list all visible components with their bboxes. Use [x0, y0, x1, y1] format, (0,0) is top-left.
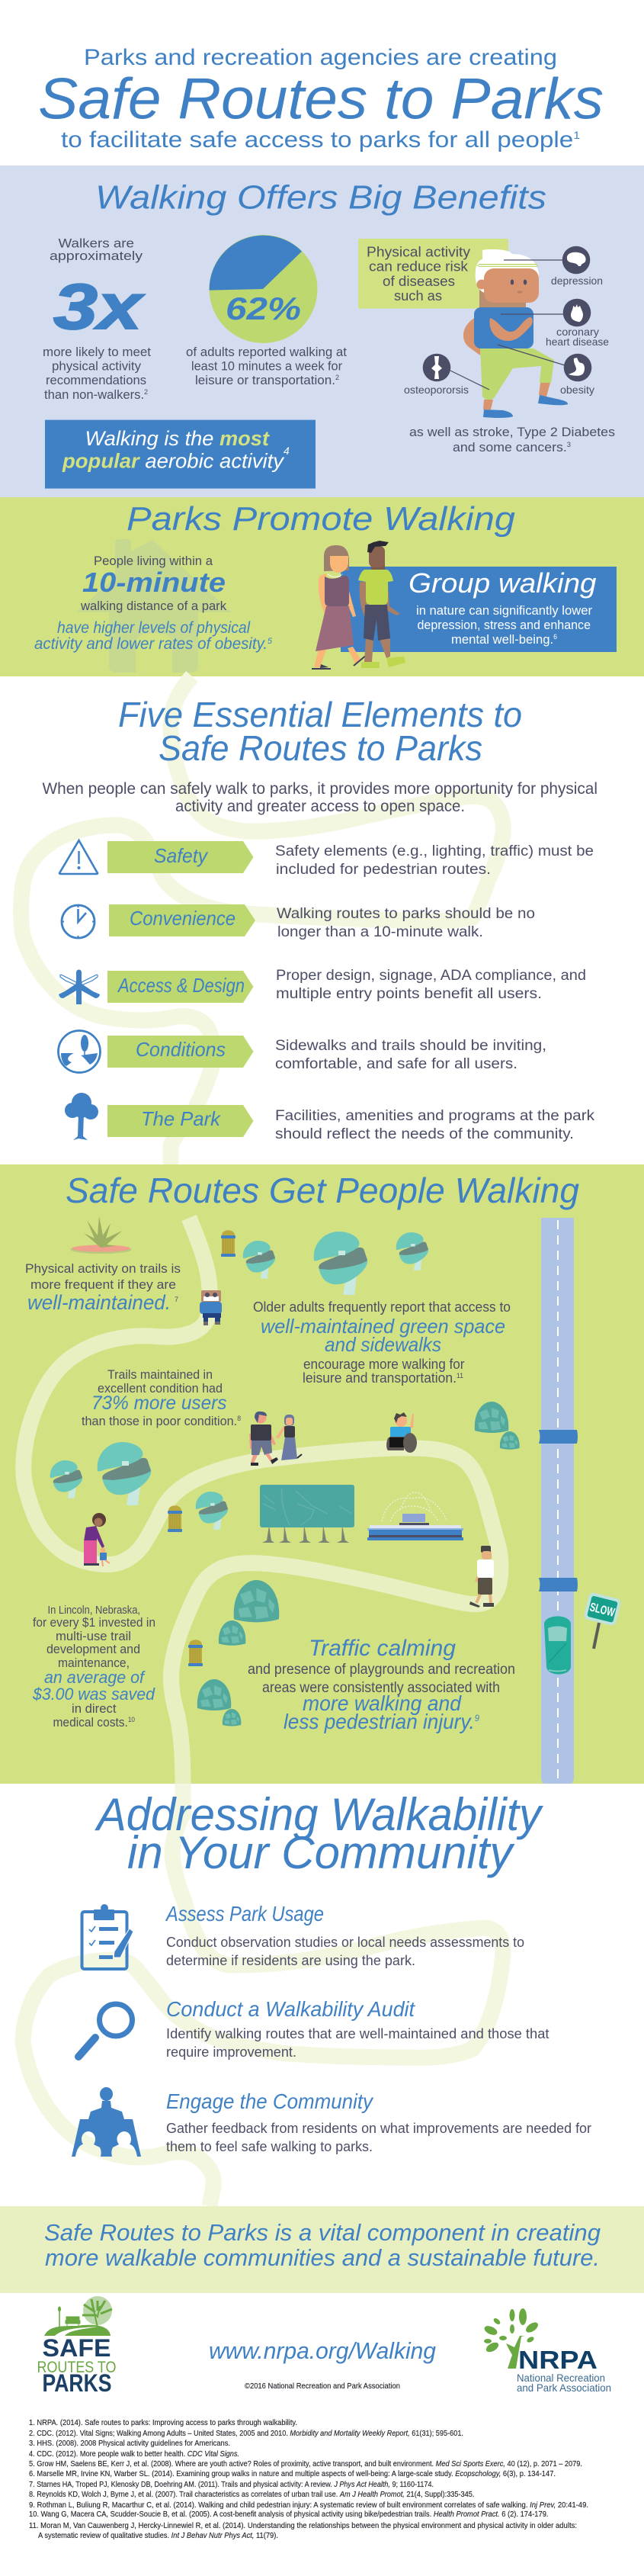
text: conduct a walkability audit: require improvement. — [166, 2044, 296, 2060]
text: traffic calming: Traffic calming — [309, 1636, 456, 1661]
callout: group walking: mental well-being. — [451, 632, 556, 647]
label: access and design — [107, 971, 253, 1003]
label: safety — [107, 841, 253, 873]
icon: bush — [197, 1679, 231, 1710]
text: older adults: and sidewalks — [325, 1333, 441, 1356]
illustration: fountain — [367, 1492, 463, 1540]
references: 7. Starnes HA, Troped PJ, Klenosky DB, Doehring AM. (2011). Trails and physical activity: A review. J Phys Act Health, 9; 1160-1174. — [29, 2480, 434, 2489]
logo: nrpa — [483, 2308, 611, 2394]
label: convenience: Convenience — [130, 907, 235, 930]
stat: 3x more likely — [43, 236, 151, 402]
line: osteoporosis — [450, 371, 489, 390]
callout: physical activity can reduce risk: can reduce risk — [369, 259, 469, 275]
text: older adults: Older adults frequently report that access to — [253, 1299, 511, 1315]
text: convenience — [277, 906, 535, 940]
text: lincoln nebraska: in direct — [72, 1701, 117, 1716]
icon: clipboard — [82, 1904, 133, 1969]
text: 10-minute walking distance: 10-minute — [82, 567, 226, 598]
icon: stomach — [564, 354, 591, 381]
references: 9. Rothman L, Buliung R, Macarthur C, et al. (2014). Walking and child pedestrian injury: A systematic review of built environment correlates of safe walking. Inj Prev, 20:41-49. — [29, 2501, 588, 2510]
heading: walking offers big benefits: Walking Offers Big Benefits — [95, 178, 546, 217]
text: traffic calming — [248, 1636, 515, 1733]
text: traffic calming: and presence of playgrounds and recreation — [248, 1662, 515, 1678]
icon: slow sign — [583, 1592, 622, 1649]
heading: safe routes get people walking: Safe Routes Get People Walking — [66, 1171, 579, 1210]
crosswalk band — [539, 1578, 578, 1592]
icon: trash can — [221, 1230, 235, 1257]
text: trails maintained — [82, 1367, 241, 1428]
icon: tree — [396, 1232, 428, 1270]
text: engage the community: Gather feedback from residents on what improvements are needed for — [166, 2121, 591, 2136]
panel: five essential elements — [43, 695, 598, 1142]
text: trails maintained: Trails maintained in — [107, 1367, 213, 1382]
pie chart: 62 percent — [209, 235, 317, 343]
icon: trash can — [188, 1640, 203, 1666]
icon: signpost — [59, 970, 100, 1004]
icon: tree — [50, 1460, 82, 1498]
panel: closing statement — [0, 2206, 644, 2293]
text: as well as stroke: 3 — [567, 441, 571, 448]
text: traffic calming: 9 — [475, 1713, 479, 1723]
label: the park: The Park — [141, 1107, 222, 1130]
illustration: older man on trail — [200, 1290, 222, 1325]
main title: Safe Routes to Parks — [38, 67, 604, 131]
text: lincoln nebraska: an average of — [44, 1668, 146, 1687]
illustration: plant — [70, 1216, 131, 1254]
text: access and design: multiple entry points benefit all users. — [276, 986, 542, 1002]
text: traffic calming: more walking and — [303, 1691, 462, 1715]
heading: five essential elements — [118, 695, 522, 768]
stat: 3x more likely: physical activity — [52, 358, 141, 374]
references: A systematic review of qualitative studies. Int J Behav Nutr Phys Act, 11(79). — [38, 2531, 278, 2540]
text: conduct a walkability audit — [166, 1997, 549, 2060]
text: lincoln nebraska: multi-use trail — [56, 1629, 131, 1643]
text: older adults: encourage more walking for — [303, 1357, 465, 1372]
callout: group walking: depression, stress and enhance — [418, 618, 591, 632]
text: trails maintained: 73% more users — [91, 1392, 227, 1414]
icon: brain — [562, 246, 590, 274]
link: nrpa walking: www.nrpa.org/Walking — [209, 2337, 436, 2364]
text: of adults reported walking: 2 — [335, 374, 339, 381]
text: of adults reported walking: of adults reported walking at — [186, 345, 347, 359]
references: 1. NRPA. (2014). Safe routes to parks: Improving access to parks through walkability. — [29, 2418, 297, 2427]
icon: ghost house — [76, 539, 232, 673]
line: coronary — [501, 313, 564, 315]
text: of adults reported walking: leisure or transportation. — [195, 373, 335, 387]
icon: bush — [219, 1620, 245, 1646]
references: 11. Moran M, Van Cauwenberg J, Hercky-Linnewiel R, et al. (2014). Understanding the relationships between the physical environment and physical activity in older adults: — [29, 2521, 577, 2530]
text: engage the community: Engage the Community — [166, 2089, 374, 2113]
text: trails maintained: excellent condition had — [98, 1381, 223, 1396]
text: safety: included for pedestrian routes. — [276, 862, 491, 878]
text: trails maintained: 8 — [237, 1415, 241, 1422]
callout: most popular aerobic activity — [45, 420, 316, 489]
stat: 3x more likely: more likely to meet — [43, 345, 151, 359]
callout: most popular aerobic activity: Walking is the most — [85, 427, 270, 450]
stat: 3x more likely: than non-walkers. — [44, 387, 146, 402]
text: older adults: well-maintained green space — [261, 1315, 505, 1338]
copyright: ©2016 National Recreation and Park Association — [245, 2382, 400, 2391]
text: physical activity on trails: more frequent if they are — [30, 1277, 176, 1292]
text: conduct a walkability audit: Conduct a Walkability Audit — [166, 1997, 415, 2021]
text: 10-minute walking distance — [34, 554, 273, 653]
text: older adults: leisure and transportation. — [303, 1370, 461, 1386]
text: lincoln nebraska: 10 — [128, 1716, 135, 1723]
text: lincoln nebraska: maintenance, — [58, 1656, 130, 1670]
label: coronary heart disease: coronary — [556, 326, 599, 338]
references — [29, 2418, 588, 2540]
label: access and design: Access & Design — [117, 974, 245, 997]
text: lincoln nebraska: for every $1 invested in — [33, 1615, 155, 1630]
stat: 3x more likely: Walkers are — [58, 236, 134, 251]
panel: addressing walkability — [72, 1789, 591, 2157]
text: older adults — [253, 1299, 511, 1386]
text: assess park usage: Conduct observation studies or local needs assessments to — [166, 1935, 524, 1950]
label: the park — [107, 1105, 253, 1137]
trail: pale route behind addressing walkability — [23, 1784, 503, 2206]
panel: parks promote walking — [0, 497, 644, 676]
text: the park — [275, 1108, 595, 1142]
text: conditions — [275, 1038, 546, 1072]
icon: bush — [475, 1402, 508, 1433]
text: the park: should reflect the needs of the community. — [275, 1126, 574, 1142]
label: conditions: Conditions — [136, 1038, 226, 1061]
trail — [24, 1218, 501, 1784]
text: physical activity on trails: 7 — [175, 1296, 178, 1303]
stat: 3x more likely: 3x — [53, 271, 145, 342]
text: traffic calming: areas were consistently associated with — [262, 1680, 500, 1696]
illustration: woman walking — [312, 545, 367, 670]
text: access and design — [276, 968, 586, 1002]
text: older adults: 11 — [457, 1372, 463, 1380]
crosswalk band — [539, 1430, 578, 1444]
line: depression — [504, 259, 562, 261]
pie chart: 62 percent: 62% — [226, 291, 301, 326]
text: as well as stroke: as well as stroke, Type 2 Diabetes — [409, 425, 615, 439]
text: safety: Safety elements (e.g., lighting, traffic) must be — [275, 843, 594, 859]
callout: group walking: 6 — [553, 633, 557, 641]
panel: walking offers big benefits — [0, 165, 644, 497]
text: 10-minute walking distance: walking distance of a park — [80, 599, 226, 613]
text: lincoln nebraska: In Lincoln, Nebraska, — [47, 1604, 140, 1617]
text: assess park usage: determine if residents are using the park. — [166, 1953, 415, 1968]
references: 10. Wang G, Macera CA, Scudder-Soucie B, et al. (2005). A cost-benefit analysis of physical activity using bike/pedestrian trails. Health Promot Pract. 6 (2). 174-179. — [29, 2510, 549, 2519]
references: 8. Reynolds KD, Wolch J, Byrne J, et al. (2007). Trail characteristics as correlates of urban trail use. Am J Health Promot, 21(4, Suppl):335-345. — [29, 2490, 474, 2499]
logo: safe routes to parks: ROUTES TO — [37, 2359, 116, 2376]
text: lincoln nebraska: $3.00 was saved — [32, 1685, 155, 1704]
trail: pale route behind five essential elements — [21, 676, 503, 1164]
logo: safe routes to parks: PARKS — [43, 2369, 111, 2397]
intro text: When people can safely walk to parks, it provides more opportunity for physical — [43, 780, 598, 798]
icon: magnifier — [78, 2004, 133, 2057]
text: 10-minute walking distance: have higher levels of physical — [57, 619, 251, 637]
icon: clock — [61, 904, 95, 939]
text: conditions: comfortable, and safe for all users. — [275, 1056, 517, 1072]
intro text — [43, 780, 598, 815]
callout: most popular aerobic activity: 4 — [284, 445, 290, 457]
references: 3. HHS. (2008). 2008 Physical activity guidelines for Americans. — [29, 2439, 230, 2448]
heading: five essential elements: Five Essential Elements to — [118, 695, 522, 734]
text: conduct a walkability audit: Identify walking routes that are well-maintained and those that — [166, 2026, 549, 2041]
line: obesity — [498, 345, 565, 365]
icon: bush — [223, 1709, 241, 1726]
icon: bush — [234, 1580, 279, 1622]
header subtitle: to facilitate safe access to parks for all people — [61, 127, 522, 153]
illustration: couple walking — [249, 1412, 302, 1466]
text: of adults reported walking — [186, 345, 347, 387]
text: conditions: Sidewalks and trails should be inviting, — [275, 1038, 546, 1054]
callout: physical activity can reduce risk — [358, 239, 508, 309]
text: physical activity on trails: well-maintained. — [27, 1291, 171, 1314]
text: assess park usage: Assess Park Usage — [165, 1902, 324, 1926]
icon: warning triangle — [59, 840, 98, 874]
illustration: hedge — [260, 1485, 354, 1543]
icon: tree — [65, 1093, 98, 1140]
text: assess park usage — [165, 1902, 524, 1968]
text: trails maintained: than those in poor condition. — [82, 1414, 245, 1428]
icon: conditions — [58, 1031, 101, 1072]
label: obesity: obesity — [560, 384, 594, 396]
icon: bones — [423, 354, 450, 381]
text: access and design: Proper design, signage, ADA compliance, and — [276, 968, 586, 984]
text: as well as stroke — [409, 425, 615, 454]
text: 10-minute walking distance: People living within a — [94, 554, 213, 568]
icon: tree — [98, 1442, 151, 1505]
logo: safe routes to parks — [37, 2296, 116, 2397]
callout: group walking: in nature can significantly lower — [416, 603, 592, 618]
logo: safe routes to parks: SAFE — [43, 2334, 111, 2362]
label: osteoporosis: osteopororsis — [404, 384, 469, 396]
stat: 3x more likely: approximately — [50, 249, 143, 263]
callout: group walking: Group walking — [409, 567, 596, 599]
icon: tree — [314, 1232, 367, 1295]
text: convenience: longer than a 10-minute walk. — [277, 924, 483, 940]
text: physical activity on trails — [25, 1261, 181, 1314]
icon: slow sign: SLOW — [588, 1601, 617, 1620]
heading: addressing walkability: in Your Community — [127, 1827, 515, 1878]
text: engage the community: them to feel safe walking to parks. — [166, 2139, 373, 2154]
header kicker: Parks and recreation agencies are creating — [84, 45, 557, 70]
panel: safe routes get people walking — [0, 1164, 644, 1784]
stat: 3x more likely: recommendations — [46, 373, 146, 387]
label: conditions — [107, 1036, 253, 1068]
text: 10-minute walking distance: 5 — [268, 637, 273, 646]
panel: closing statement: more walkable communities and a sustainable future. — [45, 2244, 600, 2271]
illustration: walking person — [463, 249, 568, 418]
icon: heart — [563, 299, 591, 326]
references: 2. CDC. (2012). Vital Signs; Walking Among Adults – United States, 2005 and 2010. Morbidity and Mortality Weekly Report, 61(31); 595-601. — [29, 2429, 463, 2438]
logo: nrpa: National Recreation — [517, 2372, 605, 2384]
illustration: man walking — [358, 541, 405, 668]
callout: group walking — [341, 567, 617, 652]
header — [38, 45, 604, 153]
label: depression: depression — [551, 275, 603, 287]
callout: physical activity can reduce risk: Physical activity — [367, 245, 470, 260]
stat: 3x more likely: 2 — [144, 388, 148, 396]
label: coronary heart disease: heart disease — [546, 336, 609, 348]
text: traffic calming: less pedestrian injury. — [284, 1710, 489, 1733]
text: engage the community — [166, 2089, 591, 2154]
text: as well as stroke: and some cancers. — [453, 440, 562, 454]
text: of adults reported walking: least 10 minutes a week for — [191, 358, 342, 374]
intro text: activity and greater access to open space. — [175, 798, 465, 815]
references: 5. Grow HM, Saelens BE, Kerr J, et al. (2008). Where are youth active? Roles of proximity, active transport, and built environment. Med Sci Sports Exerc, 40 (12), p. 2071 – 2079. — [29, 2459, 582, 2468]
logo: nrpa: and Park Association — [517, 2382, 611, 2394]
callout: physical activity can reduce risk: such as — [394, 288, 442, 304]
header subtitle: 1 — [573, 129, 580, 141]
icon: bush — [500, 1431, 520, 1450]
heading: addressing walkability: Addressing Walkability — [95, 1789, 544, 1840]
icon: trash can — [168, 1505, 182, 1532]
text: lincoln nebraska — [32, 1604, 155, 1730]
text: lincoln nebraska: medical costs. — [53, 1715, 135, 1730]
references: 6. Marselle MR, Irvine KN, Warber SL. (2014). Examining group walks in nature and multiple aspects of well-being: A large-scale study. Ecopschology, 6(3), p. 134-147. — [29, 2469, 556, 2478]
heading: parks promote walking: Parks Promote Walking — [127, 500, 516, 538]
text: safety — [275, 843, 594, 878]
callout: physical activity can reduce risk: of diseases — [383, 274, 455, 289]
text: 10-minute walking distance: activity and lower rates of obesity. — [34, 635, 274, 653]
icon: car — [544, 1617, 571, 1675]
text: convenience: Walking routes to parks should be no — [277, 906, 535, 922]
panel: closing statement: Safe Routes to Parks is a vital component in creating — [44, 2219, 601, 2246]
illustration: person in wheelchair — [386, 1412, 417, 1453]
icon: tree — [196, 1492, 228, 1530]
text: the park: Facilities, amenities and programs at the park — [275, 1108, 595, 1124]
logo: nrpa: NRPA — [518, 2346, 598, 2374]
label: convenience — [109, 904, 255, 936]
callout: most popular aerobic activity: popular aerobic activity — [62, 450, 285, 473]
label: coronary heart disease — [546, 326, 609, 348]
references: 4. CDC. (2012). More people walk to better health. CDC Vital Signs. — [29, 2449, 239, 2459]
label: safety: Safety — [154, 844, 209, 867]
heading: addressing walkability — [95, 1789, 544, 1878]
text: lincoln nebraska: development and — [46, 1642, 140, 1656]
text: physical activity on trails: Physical activity on trails is — [25, 1261, 181, 1276]
heading: five essential elements: Safe Routes to Parks — [159, 728, 482, 768]
road — [541, 1218, 574, 1784]
illustration: man with cap — [469, 1546, 494, 1608]
icon: community people — [72, 2087, 141, 2157]
illustration: adult with child — [84, 1513, 110, 1566]
icon: tree — [243, 1241, 275, 1279]
